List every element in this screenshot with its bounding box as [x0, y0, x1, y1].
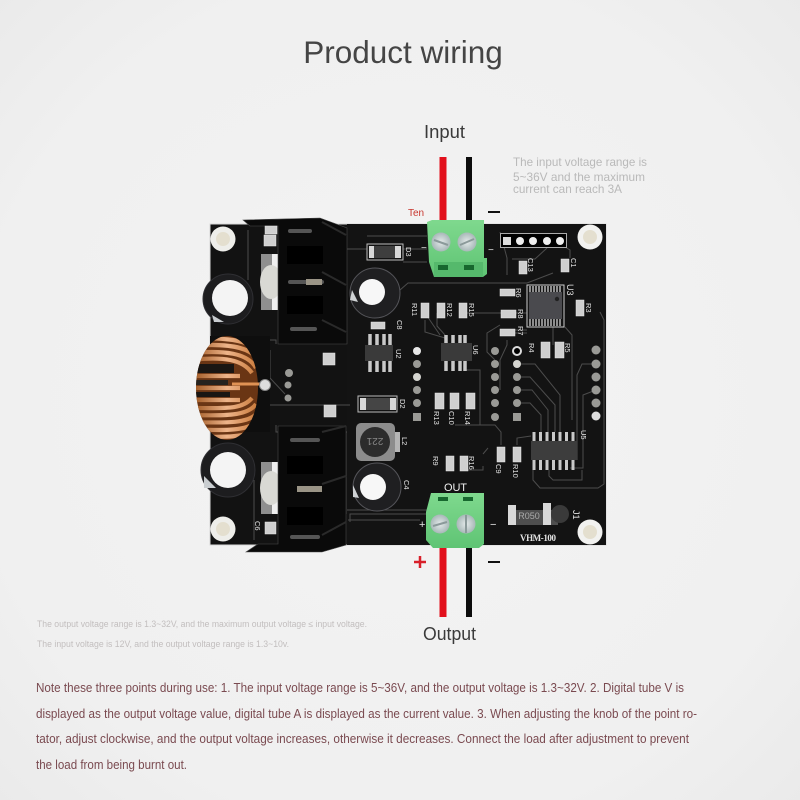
input wires — [440, 157, 472, 229]
silkscreen labels: R13 — [432, 411, 441, 425]
silkscreen labels: R4 — [527, 343, 536, 353]
current shunt R050: R050 — [518, 511, 540, 521]
capacitor: upper centre — [350, 268, 400, 318]
silkscreen labels: J1 — [571, 510, 581, 520]
silkscreen labels: OUT — [444, 482, 467, 494]
silkscreen labels: R3 — [584, 303, 593, 313]
silkscreen labels: R9 — [431, 456, 440, 466]
silkscreen labels: − — [490, 519, 496, 531]
usage notes paragraph: the load from being burnt out. — [36, 757, 187, 772]
output wires — [440, 548, 472, 617]
silkscreen labels: R14 — [463, 411, 472, 425]
input voltage note — [513, 155, 647, 196]
bottom heatsink — [246, 426, 346, 552]
silkscreen labels: C10 — [447, 411, 456, 425]
silkscreen labels: U6 — [471, 345, 480, 355]
label: output: Output — [423, 624, 476, 644]
silkscreen labels: VHM-100 — [520, 533, 556, 543]
capacitors — [201, 268, 401, 511]
smd components — [264, 226, 584, 534]
silkscreen labels: − — [421, 243, 427, 254]
capacitor: lower left — [201, 443, 255, 497]
input voltage note: current can reach 3A — [513, 182, 622, 196]
usage notes paragraph: displayed as the output voltage value, digital tube A is displayed as the current value. 3. When adjusting the knob of the point ro- — [36, 706, 697, 721]
silkscreen labels: C4 — [402, 480, 411, 490]
label: positive output — [414, 556, 426, 568]
top heatsink — [243, 218, 347, 344]
label: negative output — [488, 561, 500, 563]
ic U3 — [527, 285, 564, 327]
silkscreen labels: R15 — [467, 303, 476, 317]
diode D3 — [367, 244, 403, 260]
silkscreen labels: D3 — [404, 247, 413, 257]
output terminal block — [426, 493, 484, 548]
diode D2 — [358, 396, 397, 412]
usage notes paragraph — [36, 680, 697, 772]
capacitor: lower centre — [353, 463, 401, 511]
voltage range notes: The input voltage is 12V, and the output voltage range is 1.3~10v. — [37, 639, 289, 649]
silkscreen labels: R11 — [410, 303, 419, 316]
silkscreen labels: C6 — [253, 521, 262, 531]
capacitor: upper left — [203, 274, 253, 324]
ic U2 — [365, 334, 393, 372]
ic U5 — [531, 432, 577, 470]
power inductor L2 — [356, 423, 400, 461]
circuit board — [190, 218, 606, 552]
silkscreen labels: C9 — [494, 464, 503, 474]
pcb traces — [210, 230, 604, 540]
mounting holes — [210, 224, 602, 544]
silkscreen labels: U2 — [394, 349, 403, 359]
silkscreen labels: R12 — [445, 303, 454, 317]
silkscreen labels: R5 — [563, 343, 572, 353]
header pins — [500, 234, 566, 248]
toroid inductor — [190, 336, 270, 440]
usage notes paragraph: Note these three points during use: 1. The input voltage range is 5~36V, and the output voltage is 1.3~32V. 2. Digital tube V is — [36, 680, 684, 695]
silkscreen labels: R16 — [467, 456, 476, 470]
top mosfet — [260, 254, 282, 310]
through-hole pads — [284, 346, 600, 421]
silkscreen labels: C1 — [569, 258, 578, 268]
label: input: Input — [424, 122, 465, 142]
voltage range notes: The output voltage range is 1.3~32V, and the maximum output voltage ≤ input voltage. — [37, 619, 367, 629]
silkscreen labels: C8 — [395, 320, 404, 330]
usage notes paragraph: tator, adjust clockwise, and the output voltage increases, otherwise it decreases. Connect the load after adjustment to prevent — [36, 731, 689, 746]
infographic canvas — [36, 40, 696, 772]
silkscreen labels: U5 — [579, 430, 588, 440]
label: positive input: Ten — [408, 208, 424, 219]
silkscreen labels: R8 — [516, 309, 525, 319]
ic U6 — [441, 335, 472, 371]
power inductor L2: 221 — [366, 435, 383, 446]
current shunt R050 — [508, 503, 569, 525]
input voltage note: The input voltage range is — [513, 155, 647, 169]
silkscreen labels: − — [488, 245, 494, 256]
silkscreen labels: R10 — [511, 464, 520, 478]
input terminal block — [427, 220, 487, 277]
silkscreen labels: U3 — [565, 284, 575, 296]
silkscreen labels: C13 — [526, 258, 535, 272]
pcb base — [210, 224, 606, 545]
silkscreen labels: + — [419, 519, 425, 531]
silkscreen labels: L2 — [400, 437, 409, 445]
silkscreen labels — [253, 243, 593, 543]
title: Product wiring — [303, 34, 503, 70]
bottom mosfet — [260, 462, 282, 514]
input voltage note: 5~36V and the maximum — [513, 170, 645, 184]
silkscreen labels: R7 — [516, 326, 525, 336]
silkscreen labels: D2 — [398, 399, 407, 409]
label: negative input — [488, 211, 500, 213]
voltage range notes — [37, 619, 367, 649]
silkscreen labels: R6 — [514, 288, 523, 298]
